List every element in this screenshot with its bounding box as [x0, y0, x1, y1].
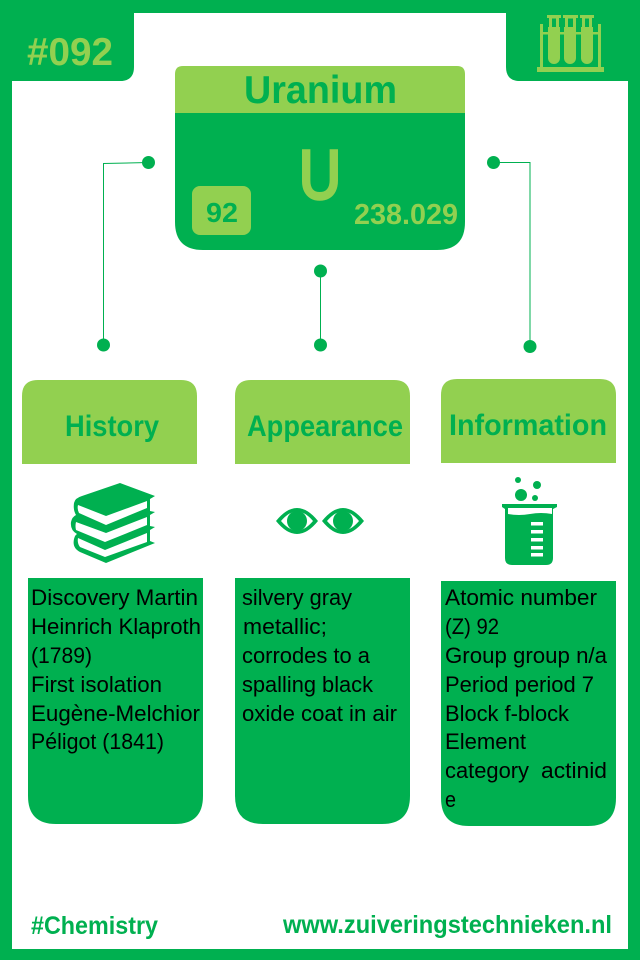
element symbol: U: [299, 136, 341, 214]
panel: history: [22, 380, 203, 824]
atomic mass: 238.029: [354, 199, 458, 231]
heading: history: History: [65, 410, 159, 443]
body: information: category: [445, 758, 529, 783]
icon: test tubes in rack: [537, 15, 604, 72]
footer: hashtag: #Chemistry: [31, 912, 158, 940]
connector: left: [97, 156, 155, 352]
heading: information: Information: [449, 409, 607, 442]
footer: website: www.zuiveringstechnieken.nl: [282, 911, 612, 939]
body: history: Heinrich Klaproth: [31, 614, 201, 639]
atomic number box: [192, 186, 251, 235]
body: information: Element: [445, 729, 526, 754]
body: information: Atomic number: [445, 585, 597, 610]
badge: element number: #092: [27, 31, 113, 74]
connector: centre: [314, 264, 327, 352]
icon: beaker with bubbles: [502, 477, 557, 565]
body: appearance: corrodes to a: [242, 643, 371, 668]
body: appearance: spalling black: [242, 672, 374, 697]
body: appearance: [235, 578, 410, 824]
body: appearance: metallic;: [243, 614, 327, 639]
body: history: (1789): [31, 643, 92, 668]
element name: Uranium: [244, 69, 397, 112]
heading: history: [22, 380, 197, 464]
body: appearance: silvery gray: [242, 585, 352, 610]
atomic number box: 92: [206, 197, 238, 228]
body: history: Eugène-Melchior: [31, 701, 200, 726]
heading: appearance: Appearance: [247, 410, 403, 443]
body: history: Discovery Martin: [31, 585, 198, 610]
body: information: Group group n/a: [445, 643, 608, 668]
panel: appearance: [235, 380, 410, 824]
panel: information: [441, 379, 616, 826]
body: history: First isolation: [31, 672, 162, 697]
body: information: actinid: [541, 758, 607, 783]
icon: stack of books: [71, 483, 155, 563]
body: history: [28, 578, 203, 824]
body: information: (Z) 92: [445, 614, 499, 639]
body: information: Block f-block: [445, 701, 570, 726]
connector: right: [487, 156, 536, 353]
body: history: Péligot (1841): [31, 729, 164, 754]
element card: uranium: [175, 66, 465, 250]
heading: information: [441, 379, 616, 463]
heading: appearance: [235, 380, 410, 464]
body: appearance: oxide coat in air: [242, 701, 397, 726]
body: information: [441, 581, 616, 826]
body: information: Period period 7: [445, 672, 594, 697]
icon: pair of eyes: [276, 508, 364, 534]
badge: element number: [0, 0, 134, 81]
body: information: e: [445, 787, 456, 812]
